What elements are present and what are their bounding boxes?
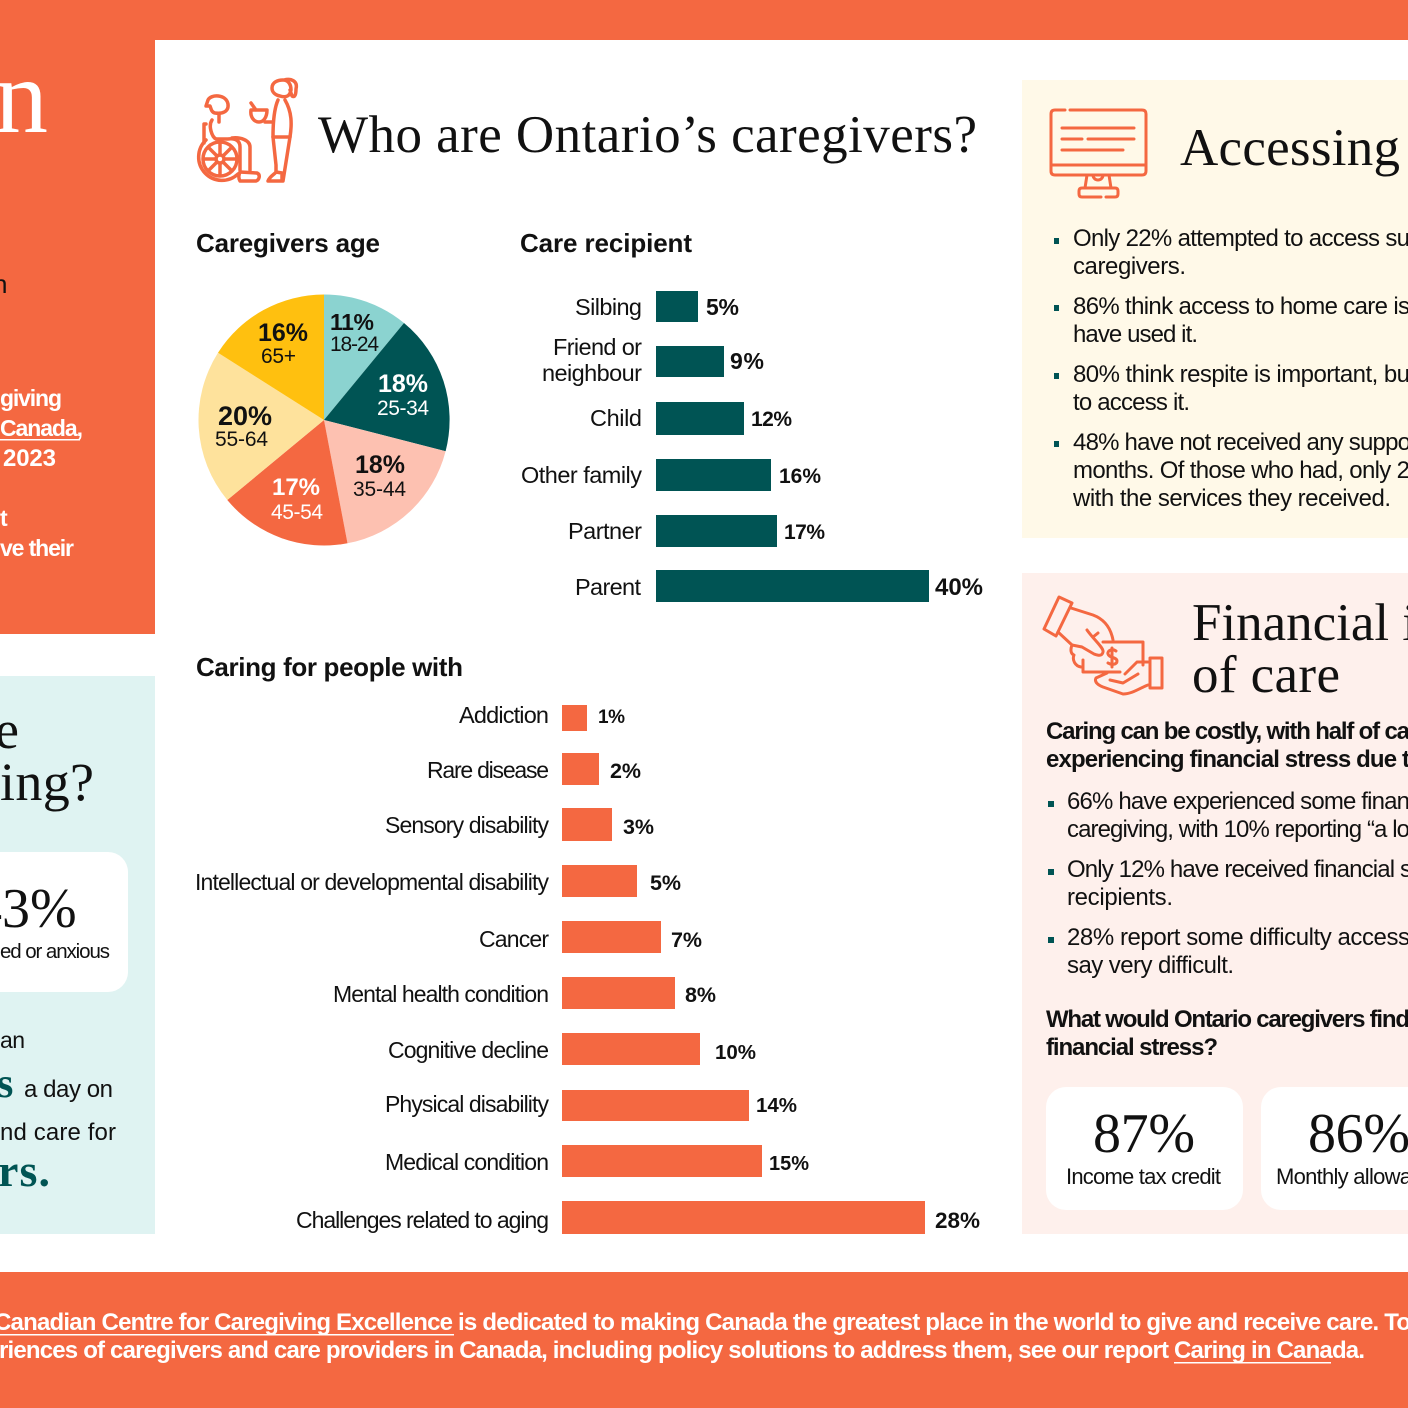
- stat card: monthly allowance: [1261, 1087, 1408, 1210]
- pie chart: caregivers age: 18-24: [330, 333, 379, 356]
- bar chart: caring for people with: Cancer: [479, 926, 549, 952]
- pie chart: caregivers age: 45-54: [271, 501, 323, 524]
- bar chart: caring for people with: [195, 702, 980, 1234]
- pie chart: caregivers age: 65+: [261, 345, 296, 368]
- bullet list: finances: [1048, 788, 1408, 979]
- panel: accessing supports: [1022, 80, 1408, 538]
- stat card: [0, 852, 128, 992]
- bar chart: care recipient: Friend or: [553, 334, 642, 360]
- bar chart: caring for people with: 7%: [671, 928, 702, 952]
- bar chart: care recipient: [521, 291, 983, 602]
- bullet list: access: months. Of those who had, only 2: [1073, 457, 1408, 484]
- bar chart: care recipient: 9%: [730, 348, 764, 374]
- intro text: Caring can be costly, with half of ca: [1046, 718, 1408, 745]
- panel: intro: giving: [0, 385, 62, 411]
- icon: computer monitor: [1051, 110, 1146, 197]
- bullet list: finances: 66% have experienced some finan: [1067, 788, 1408, 815]
- bar chart: caring for people with: Intellectual or developmental disability: [195, 869, 550, 895]
- bar chart: care recipient: Partner: [568, 518, 642, 544]
- panel: financial impact of care: [1022, 573, 1408, 1234]
- pie chart: caregivers age: 18%: [378, 370, 428, 398]
- bar chart: care recipient: 16%: [779, 465, 821, 488]
- heading: accessing: Accessing: [1180, 119, 1400, 177]
- bar chart: care recipient: 17%: [784, 521, 825, 544]
- bar chart: caring for people with: Rare disease: [427, 757, 549, 783]
- intro text: experiencing financial stress due t: [1046, 746, 1408, 773]
- bar chart: care recipient: 12%: [751, 408, 792, 431]
- intro text: [1046, 718, 1408, 773]
- bullet list: access: [1054, 225, 1408, 512]
- panel: intro: 2023: [3, 445, 56, 472]
- panel: impact on caregivers: ing?: [0, 752, 94, 812]
- bar chart: caring for people with: Cognitive decline: [388, 1037, 549, 1063]
- bullet list: finances: recipients.: [1067, 884, 1173, 911]
- bullet list: access: to access it.: [1073, 389, 1190, 416]
- stat card: income tax credit: Income tax credit: [1066, 1164, 1221, 1189]
- stat card: income tax credit: [1046, 1087, 1243, 1210]
- footer band: Canadian Centre for Caregiving Excellence is dedicated to making Canada the greatest place in the world to give and receive care. To: [0, 1309, 1408, 1336]
- panel: impact on caregivers: an: [0, 1027, 25, 1053]
- bar chart: caring for people with: Mental health condition: [333, 981, 549, 1007]
- bar chart: care recipient: Parent: [575, 574, 641, 600]
- panel: intro: [0, 38, 155, 634]
- bar chart: care recipient: Silbing: [575, 294, 642, 320]
- bar chart: caring for people with: 1%: [598, 707, 625, 728]
- icon: caregiver and wheelchair user: [199, 79, 296, 181]
- panel: impact on caregivers: nd care for: [0, 1119, 116, 1146]
- bullet list: finances: 28% report some difficulty access: [1067, 924, 1408, 951]
- bar chart: care recipient: neighbour: [542, 360, 642, 386]
- bullet list: access: Only 22% attempted to access su: [1073, 225, 1408, 252]
- bullet list: access: 80% think respite is important, bu: [1073, 361, 1408, 388]
- subheading: What would Ontario caregivers find: [1046, 1006, 1408, 1033]
- heading: caregivers age: Caregivers age: [196, 228, 380, 258]
- bar chart: care recipient: Other family: [521, 462, 642, 488]
- stat card: income tax credit: 87%: [1093, 1103, 1195, 1165]
- pie chart: caregivers age: 18%: [355, 451, 405, 479]
- bar chart: care recipient: Child: [590, 405, 642, 431]
- heading: caring for people with: Caring for people with: [196, 652, 463, 682]
- bullet list: access: have used it.: [1073, 321, 1198, 348]
- panel: intro: Canada,: [0, 415, 83, 441]
- bullet list: finances: caregiving, with 10% reporting “a lo: [1067, 816, 1408, 843]
- bullet list: finances: say very difficult.: [1067, 952, 1234, 979]
- bar chart: care recipient: 5%: [706, 294, 739, 320]
- bar chart: caring for people with: 2%: [610, 759, 641, 783]
- bar chart: caring for people with: Addiction: [459, 702, 549, 728]
- pie chart: caregivers age: 55-64: [215, 428, 268, 451]
- bar chart: caring for people with: 15%: [769, 1153, 809, 1175]
- bar chart: caring for people with: 10%: [715, 1041, 756, 1064]
- bullet list: access: with the services they received.: [1072, 485, 1391, 512]
- subheading: financial stress?: [1046, 1034, 1218, 1061]
- bullet list: access: 48% have not received any suppo: [1073, 429, 1408, 456]
- bar chart: caring for people with: 14%: [756, 1094, 797, 1117]
- bar chart: caring for people with: 5%: [650, 871, 681, 895]
- panel: impact on caregivers: a day on: [24, 1076, 113, 1103]
- panel: intro: ve their: [0, 535, 74, 561]
- pie chart: caregivers age: 11%: [330, 309, 374, 335]
- subheading: [1046, 1006, 1408, 1061]
- stat card: monthly allowance: 86%: [1308, 1103, 1408, 1165]
- bullet list: access: 86% think access to home care is: [1073, 293, 1408, 320]
- panel: financial impact of care: of care: [1192, 646, 1340, 704]
- title: Who are Ontario’s caregivers?: [318, 106, 977, 164]
- stat card: ed or anxious: [0, 940, 110, 963]
- bar chart: care recipient: 40%: [935, 574, 983, 601]
- icon: hands exchanging money: [1044, 597, 1162, 694]
- panel: impact on caregivers: [0, 676, 155, 1234]
- pie chart: caregivers age: 20%: [218, 401, 272, 431]
- footer band: riences of caregivers and care providers in Canada, including policy solutions to address them, see our report Caring in Canada.: [0, 1337, 1365, 1364]
- bar chart: caring for people with: Sensory disability: [385, 812, 550, 838]
- footer band: [0, 1272, 1408, 1408]
- pie chart: caregivers age: 35-44: [353, 478, 406, 501]
- bar chart: caring for people with: 3%: [623, 815, 654, 839]
- pie chart: caregivers age: 25-34: [377, 397, 429, 420]
- bar chart: caring for people with: 8%: [685, 983, 716, 1007]
- heading: care recipient: Care recipient: [520, 228, 692, 258]
- top band: [0, 0, 1408, 40]
- bar chart: caring for people with: Medical condition: [385, 1149, 549, 1175]
- panel: intro: t: [0, 505, 8, 531]
- pie chart: caregivers age: 17%: [272, 474, 320, 501]
- stat card: monthly allowance: Monthly allowa: [1276, 1164, 1408, 1189]
- pie chart: caregivers age: 16%: [258, 319, 308, 347]
- pie chart: caregivers age: [198, 294, 450, 546]
- bar chart: caring for people with: Challenges related to aging: [296, 1207, 549, 1233]
- bar chart: caring for people with: Physical disability: [385, 1091, 550, 1117]
- bullet list: finances: Only 12% have received financial s: [1067, 856, 1408, 883]
- bar chart: caring for people with: 28%: [935, 1208, 980, 1233]
- bullet list: access: caregivers.: [1073, 253, 1186, 280]
